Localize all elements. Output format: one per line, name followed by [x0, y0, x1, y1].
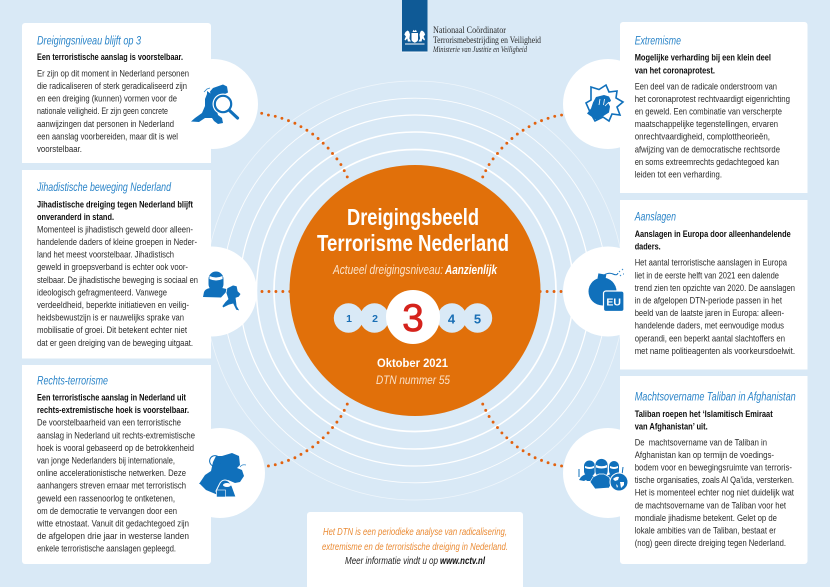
text: Rechts-terrorisme — [37, 373, 108, 387]
text: verdeeldheid, beperkte initiatieven en veilig- — [37, 300, 189, 311]
text: afwijzing van de democratische rechtsorde — [635, 144, 780, 155]
text: De machtsovername van de Taliban in — [635, 437, 767, 448]
text: handelende daders, met eenvoudige modus — [635, 321, 784, 332]
panel: Extremisme — [563, 22, 808, 193]
text: aanslag in Nederland uit rechts-extremistische — [37, 430, 195, 441]
text: de afgelopen drie jaar in westerse landen — [37, 531, 189, 542]
text: geweld in groepsverband is echter ook voor- — [37, 262, 188, 273]
text: en soms extreemrechts gedachtegoed kan — [635, 157, 779, 168]
text: en geweld. Een combinatie van verscherpte — [635, 106, 782, 118]
text: enkele terroristische aanslagen gepleegd. — [37, 544, 176, 555]
main title: Terrorisme Nederland — [317, 230, 509, 256]
organisation name: Ministerie van Justitie en Veiligheid — [432, 45, 528, 54]
threat scale: 2 — [372, 313, 378, 325]
text: online accelerationistische netwerken. Deze — [37, 468, 186, 479]
text: heidsbewustzijn is er nauwelijks sprake van — [37, 313, 184, 324]
text: rechts-extremistische hoek is voorstelbaar. — [37, 405, 189, 416]
text — [37, 34, 189, 155]
text: Momenteel is jihadistisch geweld door alleen- — [37, 224, 193, 235]
central orange circle — [290, 165, 540, 416]
text: ideologisch gefragmenteerd. Vanwege — [37, 287, 167, 298]
footer text: Meer informatie vindt u op — [345, 555, 438, 567]
text: daders. — [635, 242, 661, 253]
text: onveranderd in stand. — [37, 212, 114, 223]
text: mobilisatie of groei. Dit betekent echter niet — [37, 325, 187, 336]
text: witte etnostaat. Vanuit dit gedachtegoed zijn — [36, 518, 189, 530]
text: nationale veiligheid. Er zijn geen concrete — [37, 106, 168, 117]
footer text: Het DTN is een periodieke analyse van radicalisering, — [323, 526, 507, 538]
icon: three fighters with globe — [579, 459, 628, 491]
text: aanhangers streven ernaar met terroristisch — [37, 481, 186, 492]
text: handelende daders of kleine groepen in Neder- — [37, 237, 197, 248]
text: die radicaliseren of sterk geradicaliseerd zijn — [37, 81, 187, 92]
text: en een dreiging (kunnen) vormen voor de — [37, 94, 177, 105]
text: maatschappelijke tegenstellingen, ervaren — [635, 119, 778, 130]
text: Afghanistan kan op termijn de voedings- — [635, 450, 774, 461]
threat level subtitle: Aanzienlijk — [444, 263, 498, 277]
text: Jihadistische beweging Nederland — [36, 180, 171, 194]
main title: Dreigingsbeeld — [347, 204, 479, 230]
threat scale: 4 — [448, 312, 456, 326]
date and issue: Oktober 2021 — [377, 356, 448, 370]
text: van jonge Nederlanders bij internationale, — [37, 456, 175, 466]
text — [36, 180, 198, 349]
text: van het coronaprotest. — [635, 65, 715, 76]
icon: fist in star — [586, 85, 623, 121]
text: leiden tot een verharding. — [635, 170, 722, 180]
threat scale: 3 — [402, 297, 424, 340]
footer text: www.nctv.nl — [440, 555, 486, 567]
text: Extremisme — [635, 33, 681, 47]
panel: Jihadistische beweging — [22, 170, 257, 358]
icon: bomb with EU tag: EU — [606, 296, 621, 308]
text: met name politieagenten als voorkeursdoelwit. — [635, 346, 795, 357]
date and issue — [376, 356, 450, 387]
organisation name: Nationaal Coördinator — [433, 25, 506, 35]
text: (nog) geen directe dreiging tegen Nederland. — [635, 538, 786, 549]
date and issue: DTN nummer 55 — [376, 373, 450, 387]
text: het coronaprotest rechtvaardigt eigenrichting — [635, 94, 790, 105]
text: van Afghanistan’ uit. — [635, 421, 708, 432]
text — [635, 33, 790, 180]
header logo block — [402, 0, 541, 54]
text: Het is momenteel echter nog niet duidelijk wat — [635, 488, 794, 499]
icon: Netherlands with hooded figure — [199, 453, 246, 497]
text: Er zijn op dit moment in Nederland personen — [37, 68, 189, 80]
icon: crest — [404, 30, 425, 44]
text: Een terroristische aanslag in Nederland uit — [37, 393, 187, 404]
text: hoek is vooral gebaseerd op de betrokkenheid — [37, 443, 194, 454]
panel: Aanslagen — [563, 200, 808, 370]
text: voorstelbaar. — [37, 144, 82, 155]
text: mondiale jihadisme betekent. Gelet op de — [635, 513, 777, 524]
threat scale — [334, 290, 492, 344]
text: Het aantal terroristische aanslagen in Europa — [635, 258, 788, 269]
panel: Dreigingsniveau — [22, 23, 258, 163]
text: een aanslag voorbereiden, maar dit is wel — [37, 131, 178, 142]
text: Taliban roepen het ‘Islamitisch Emiraat — [635, 409, 773, 420]
text: beeld van de laatste jaren in Europa: alleen- — [635, 308, 784, 319]
dotted connectors — [262, 113, 568, 468]
text: in de afgelopen DTN-periode passen in het — [635, 296, 782, 306]
text: Een terroristische aanslag is voorstelbaar. — [37, 52, 183, 63]
text: bodem voor en bewegingsruimte van terroris- — [635, 462, 792, 474]
icon: balaclava person and map — [203, 272, 241, 311]
text: om de democratie te vervangen door een — [37, 506, 177, 517]
text: Jihadistische dreiging tegen Nederland blijft — [37, 199, 194, 210]
icon: bomb with EU tag — [588, 269, 624, 312]
icon: Netherlands with magnifier — [191, 84, 238, 124]
threat level subtitle: Actueel dreigingsniveau: — [332, 263, 443, 277]
text: Mogelijke verharding bij een klein deel — [635, 53, 771, 64]
panel: about DTN — [307, 512, 523, 587]
panel: Machtsovername Taliban — [563, 376, 808, 564]
main title — [317, 204, 509, 256]
footer text — [322, 526, 508, 567]
organisation name: Terrorismebestrijding en Veiligheid — [433, 35, 541, 45]
text: dat er geen dreiging van de beweging uitgaat. — [37, 338, 193, 349]
text: De voorstelbaarheid van een terroristische — [37, 418, 181, 429]
threat scale: 1 — [346, 313, 352, 325]
text: geweld een rassenoorlog te ontketenen, — [37, 493, 175, 504]
text: de machtsovername van de Taliban voor het — [635, 500, 786, 511]
threat scale: 5 — [474, 312, 481, 326]
footer text: extremisme en de terroristische dreiging in Nederland. — [322, 541, 508, 553]
text — [634, 210, 795, 357]
text: land het meest voorstelbaar. Jihadistisch — [37, 250, 174, 261]
text: Een deel van de radicale onderstroom van — [635, 81, 777, 92]
text: liet in de eerste helft van 2021 een dalende — [635, 270, 779, 281]
text — [36, 373, 195, 555]
organisation name — [432, 25, 541, 54]
text: operandi, een beperkt aantal slachtoffers en — [635, 333, 785, 344]
text: lokale ambities van de Taliban, bestaat er — [635, 526, 777, 536]
text: Dreigingsniveau blijft op 3 — [37, 34, 141, 48]
text: Aanslagen — [634, 210, 676, 224]
text: aanwijzingen dat personen in Nederland — [37, 119, 174, 130]
text: stelbaar. De jihadistische beweging is sociaal en — [37, 275, 198, 286]
text — [635, 390, 796, 549]
panel: Rechts-terrorisme — [22, 365, 265, 564]
text: onrechtvaardigheid, complottheorieën, — [635, 132, 770, 143]
text: tische organisaties, zoals Al Qa’ida, versterken. — [635, 475, 794, 486]
